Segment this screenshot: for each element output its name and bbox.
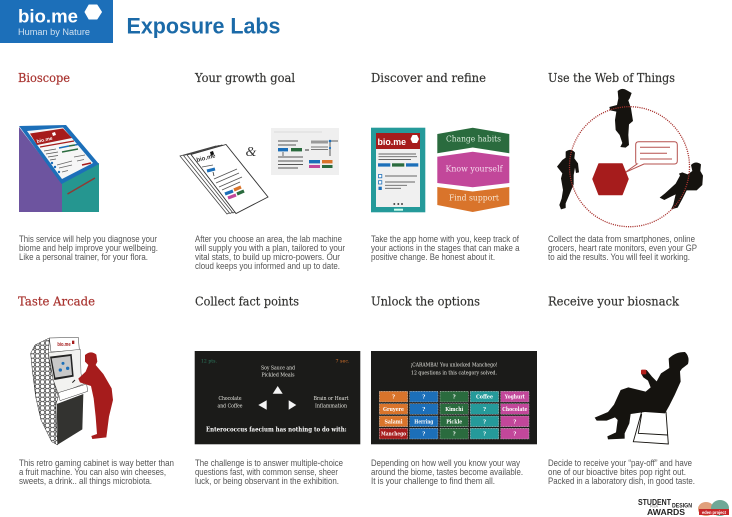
text block	[19, 458, 174, 486]
text block: Collect the data from smartphones, online	[548, 234, 695, 244]
label: change habits	[437, 128, 509, 153]
text block: The challenge is to answer multiple-choice	[195, 458, 343, 468]
text block: your actions in the stages that can make a	[371, 243, 520, 253]
text block: will supply you with a plan, tailored to your	[194, 243, 345, 253]
icon: red hexagon	[593, 164, 628, 194]
heading: Your growth goal	[194, 71, 295, 85]
icon: paper stack: bio.me	[196, 153, 217, 164]
diagram: web of things	[557, 89, 703, 227]
message: ¡CARAMBA! You unlocked Manchego!	[410, 363, 498, 369]
text block: sweets, a drink.. all things microbiota.	[19, 476, 152, 486]
text block: This retro gaming cabinet is way better than	[19, 458, 174, 468]
answer: left	[218, 396, 242, 409]
option grid: ?	[513, 419, 516, 425]
game screen: unlock grid	[371, 351, 537, 444]
option grid: ?	[453, 432, 456, 438]
silhouettes: three people	[557, 89, 703, 209]
text block: around the biome, tastes become available.	[371, 467, 523, 477]
panel: Receive your biosnack	[548, 294, 695, 486]
option grid: Salami	[384, 419, 403, 425]
text block: After you choose an area, the lab machine	[195, 234, 342, 244]
text block: grocers, heart rate monitors, even your GP	[548, 243, 697, 253]
heading: Collect fact points	[195, 294, 299, 308]
option grid: Coffee	[476, 395, 494, 401]
option grid: ?	[483, 419, 486, 425]
option grid: ?	[483, 407, 486, 413]
heading: Use the Web of Things	[548, 71, 675, 85]
label: change habits: Change habits	[446, 135, 501, 145]
option grid: Kimchi	[445, 407, 463, 413]
illustration: arcade cabinet with player: bio.me	[57, 342, 71, 348]
option grid	[379, 391, 529, 439]
panel: Unlock the options	[371, 294, 537, 486]
label: know yourself: Know yourself	[446, 164, 503, 174]
answer: up: Pickled Meals	[262, 373, 295, 379]
logo: Eden Project	[698, 500, 729, 516]
text block	[371, 234, 520, 262]
title: Exposure Labs	[126, 14, 280, 38]
icon: kiosk	[19, 125, 99, 212]
panel: Use the Web of Things	[548, 71, 703, 262]
game screen: quiz	[195, 351, 360, 444]
logo block	[0, 0, 113, 43]
option grid: ?	[422, 407, 425, 413]
panel: Your growth goal	[180, 71, 345, 271]
text block: luck, or being observant in the exhibition.	[195, 476, 339, 486]
text block: cloud keeps you informed and up to date.	[195, 261, 340, 271]
logo: Student Design Awards: AWARDS	[647, 507, 685, 517]
text block: Like a personal trainer, for your flora.	[19, 252, 148, 262]
text block	[195, 458, 343, 486]
text block	[194, 234, 345, 271]
logo block: bio.me	[18, 6, 78, 26]
text block	[19, 234, 158, 262]
speech bubble	[625, 142, 677, 172]
score: 12 pts.	[201, 359, 217, 365]
illustration: seated person with snack	[595, 352, 689, 444]
option grid: ?	[483, 432, 486, 438]
option grid: ?	[392, 395, 395, 401]
option grid: Gruyere	[383, 407, 405, 413]
answer: right: Brain or Heart	[314, 396, 349, 402]
heading: Taste Arcade	[18, 294, 95, 308]
option grid: Manchego	[381, 432, 406, 438]
icon: paper stack	[180, 144, 268, 214]
label: know yourself	[437, 152, 509, 187]
text block	[548, 458, 695, 486]
text block: one of our bioactive bites pop right out.	[548, 467, 686, 477]
heading: Unlock the options	[371, 294, 480, 308]
option grid: ?	[422, 395, 425, 401]
logo: Eden Project: eden project	[702, 510, 726, 515]
logo: Student Design Awards	[638, 498, 692, 517]
text block: vital stats, to build up micro-powers. Our	[195, 252, 340, 262]
heading: Discover and refine	[371, 71, 486, 85]
answer: up: Soy Sauce and	[261, 365, 296, 371]
logo block: Human by Nature	[18, 27, 90, 37]
answer: right: Inflammation	[315, 403, 348, 409]
message: 12 questions in this category solved.	[411, 370, 497, 376]
heading: Bioscope	[18, 71, 70, 85]
label: find support: Find support	[449, 194, 499, 204]
icon: kiosk: bio.me	[36, 136, 53, 145]
panel: Collect fact points	[195, 294, 360, 486]
label: find support	[437, 187, 509, 212]
text block: Packed in a laboratory dish, in good taste.	[548, 476, 695, 486]
logo: Student Design Awards: RSA	[650, 504, 659, 508]
text block: It is your challenge to find them all.	[371, 476, 495, 486]
timer: 7 sec.	[336, 359, 350, 365]
option grid: ?	[453, 395, 456, 401]
heading: Receive your biosnack	[548, 294, 680, 308]
option grid: Herring	[414, 419, 434, 425]
logo: Student Design Awards: DESIGN	[672, 504, 692, 510]
text block	[371, 458, 523, 486]
answer: left: and Coffee	[218, 403, 242, 409]
text block: Take the app home with you, keep track of	[371, 234, 519, 244]
option grid: ?	[422, 432, 425, 438]
panel: Taste Arcade	[18, 294, 174, 486]
text block: positive change. Be honest about it.	[371, 252, 495, 262]
text block: Depending on how well you know your way	[371, 458, 520, 468]
answer: up	[261, 365, 296, 379]
answer: right	[314, 396, 349, 409]
panel: Discover and refine	[371, 71, 520, 262]
header band	[0, 0, 280, 43]
text block: a fruit machine. You can also win cheeses,	[19, 467, 166, 477]
text block: questions fast, with common sense, sheer	[195, 467, 338, 477]
icon: plan sheet	[271, 128, 339, 175]
option grid: ?	[513, 432, 516, 438]
logo: Student Design Awards: STUDENT	[638, 498, 671, 507]
option grid: Chocolate	[502, 407, 528, 413]
message	[410, 363, 498, 376]
answer: left: Chocolate	[218, 396, 242, 402]
option grid: Pickle	[446, 419, 463, 425]
arrow buttons	[258, 386, 296, 410]
icon: tablet app: bio.me	[378, 137, 406, 147]
option grid: Yoghurt	[504, 395, 525, 401]
ampersand: &	[246, 145, 257, 160]
question: Enterococcus faecium has nothing to do with:	[206, 427, 347, 434]
panel: Bioscope	[18, 71, 158, 262]
illustration: arcade cabinet with player	[31, 337, 113, 445]
text block: This service will help you diagnose your	[19, 234, 157, 244]
text block: to aid the results. You will feel it working.	[548, 252, 690, 262]
text block: biome and help improve your wellbeing.	[19, 243, 158, 253]
text block: Decide to receive your “pay-off” and have	[548, 458, 692, 468]
icon: tablet app	[371, 128, 425, 212]
text block	[548, 234, 697, 262]
